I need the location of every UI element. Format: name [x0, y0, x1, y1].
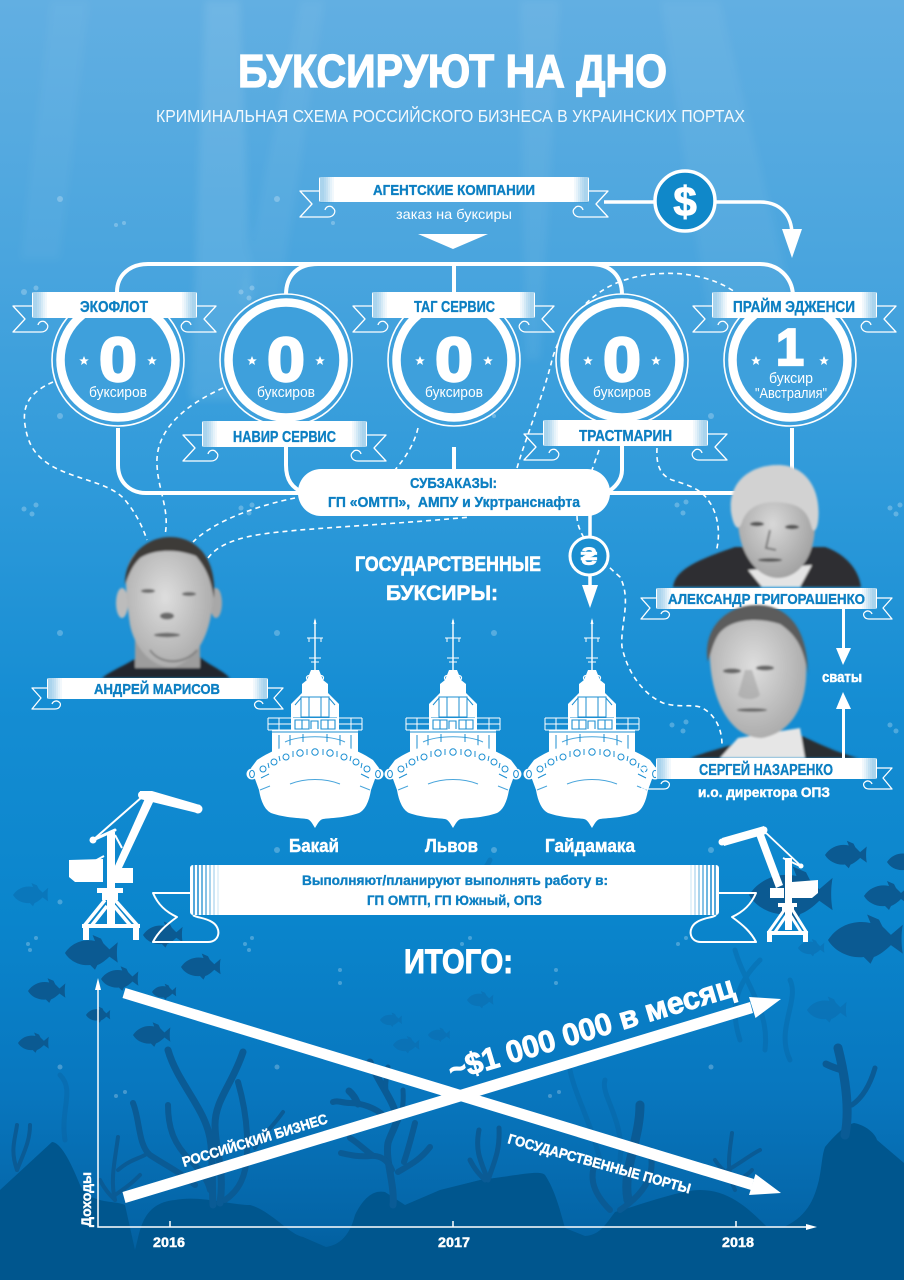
tug: Lviv	[384, 618, 522, 856]
line chart: revenue	[78, 969, 817, 1250]
heading: state tugs: БУКСИРЫ:	[386, 582, 498, 605]
panel: Ecoflot circle: 0	[99, 326, 137, 395]
chart x labels: 2017	[438, 1234, 470, 1250]
ribbon: Andrey Marisov	[32, 678, 283, 709]
ribbon: Ecoflot	[13, 292, 216, 332]
panel: Prime Agency circle: "Австралия"	[755, 385, 827, 402]
ribbon: Alexander Grigorashenko: АЛЕКСАНДР ГРИГОРАШЕНКО	[668, 591, 865, 608]
role caption: и.о. директора ОПЗ	[698, 784, 830, 800]
panel: Ecoflot circle	[52, 294, 184, 426]
icon: dollar: $	[673, 178, 697, 225]
tug: Haydamaka	[524, 618, 660, 856]
panel: Tag Service circle: 0	[435, 326, 473, 395]
bubbles	[21, 196, 902, 1098]
tug: Bakay	[246, 618, 384, 856]
chart x labels: 2018	[722, 1234, 754, 1250]
chart y label: Доходы	[78, 1172, 94, 1227]
panel: Trustmarine circle: 0	[603, 326, 641, 395]
portrait: Andrey Marisov	[102, 537, 230, 678]
panel: work ports ribbon: ГП ОМТП, ГП Южный, ОПЗ	[367, 892, 542, 908]
light rays	[20, 0, 800, 400]
arrow: order down triangle	[418, 234, 488, 249]
label: state ports: ГОСУДАРСТВЕННЫЕ ПОРТЫ	[506, 1130, 693, 1196]
ribbon: Trustmarine: ТРАСТМАРИН	[579, 428, 672, 445]
chart x labels	[153, 1234, 754, 1250]
panel: Trustmarine circle: буксиров	[593, 384, 651, 401]
heading: state tugs	[355, 553, 541, 605]
arrow: money to Prime Agency	[604, 202, 802, 258]
arrow: subcontract to tugs	[582, 510, 598, 608]
panel: subcontracts pill: СУБЗАКАЗЫ:	[410, 475, 497, 492]
title: БУКСИРУЮТ НА ДНО	[238, 45, 667, 97]
panel: Navir circle: буксиров	[257, 384, 315, 401]
dashed relation lines	[24, 273, 735, 745]
portrait: Sergey Nazarenko	[690, 605, 858, 758]
kelp and coral	[13, 1050, 760, 1210]
faint fish	[13, 883, 847, 1053]
ribbon: Sergey Nazarenko: СЕРГЕЙ НАЗАРЕНКО	[699, 761, 833, 779]
ribbon: Navir Service: НАВИР СЕРВИС	[233, 429, 336, 446]
arrow: Russian business rising	[122, 997, 781, 1203]
ribbon: Ecoflot: ЭКОФЛОТ	[80, 299, 148, 316]
ribbon: Trustmarine	[524, 420, 727, 460]
seabed	[0, 1123, 904, 1280]
ribbon: Tag Service	[353, 292, 554, 332]
tug: Haydamaka: Гайдамака	[545, 836, 636, 856]
panel: Navir circle: 0	[267, 326, 305, 395]
ribbon: Andrey Marisov: АНДРЕЙ МАРИСОВ	[94, 680, 220, 698]
panel: agencies ribbon: АГЕНТСКИЕ КОМПАНИИ	[373, 182, 535, 199]
panel: Prime Agency circle: буксир	[769, 370, 813, 387]
tug: Lviv: Львов	[425, 836, 478, 856]
faint background plants	[60, 860, 792, 1160]
order note: заказ на буксиры	[396, 206, 512, 222]
panel: work ports ribbon	[153, 865, 756, 942]
dark fish	[18, 841, 904, 1053]
ribbon: Alexander Grigorashenko	[641, 588, 892, 619]
panel: Trustmarine circle	[556, 294, 688, 426]
panel: Tag Service circle	[388, 294, 520, 426]
icon: right crane	[718, 826, 818, 942]
panel: Tag Service circle: буксиров	[425, 384, 483, 401]
panel: Prime Agency circle: 1	[776, 319, 804, 377]
arrows: in-laws: сваты	[822, 669, 862, 686]
heading: total: ИТОГО:	[404, 943, 513, 981]
label: Russian business: РОССИЙСКИЙ БИЗНЕС	[180, 1109, 329, 1170]
panel: Navir circle	[220, 294, 352, 426]
panel: subcontracts pill: ГП «ОМТП», АМПУ и Укртранснафта	[328, 494, 581, 511]
icon: hryvnia: ₴	[581, 543, 598, 571]
panel: Prime Agency circle	[724, 294, 856, 426]
ribbon: Tag Service: ТАГ СЕРВИС	[414, 299, 495, 316]
panel: agencies ribbon	[300, 177, 608, 217]
right coral	[826, 1048, 875, 1135]
heading: state tugs: ГОСУДАРСТВЕННЫЕ	[355, 553, 541, 576]
label: one million per month: ~$1 000 000 в месяц	[444, 969, 738, 1088]
icon: hryvnia	[570, 537, 608, 575]
panel: Ecoflot circle: буксиров	[89, 384, 147, 401]
portrait: Alexander Grigorashenko	[673, 465, 861, 587]
subtitle: КРИМИНАЛЬНАЯ СХЕМА РОССИЙСКОГО БИЗНЕСА В УКРАИНСКИХ ПОРТАХ	[156, 105, 745, 126]
icon: dollar	[655, 171, 715, 231]
chart x labels: 2016	[153, 1234, 185, 1250]
icon: left crane	[69, 791, 202, 940]
ribbon: Navir Service	[183, 421, 386, 461]
tug: Bakay: Бакай	[289, 836, 339, 856]
ribbon: Prime Agency	[693, 292, 896, 332]
ribbon: Prime Agency: ПРАЙМ ЭДЖЕНСИ	[733, 298, 855, 316]
panel: subcontracts pill	[298, 469, 610, 516]
ribbon: Sergey Nazarenko	[641, 758, 892, 789]
arrow: state ports falling	[122, 988, 781, 1195]
chart axes	[95, 978, 817, 1230]
connector lines between companies	[117, 264, 793, 493]
arrows: in-laws	[822, 609, 862, 758]
panel: work ports ribbon: Выполняют/планируют выполнять работу в:	[302, 872, 608, 888]
